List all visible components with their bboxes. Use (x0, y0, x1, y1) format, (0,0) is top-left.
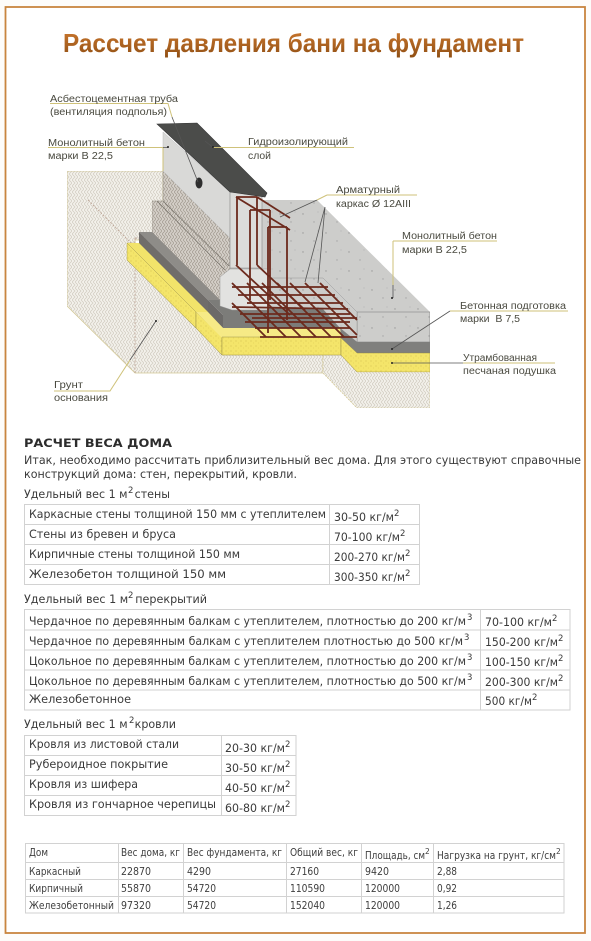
table: floors: Железобетонное (29, 692, 131, 706)
brick wall section (152, 171, 230, 300)
table header: Вес фундамента, кг (187, 846, 282, 859)
row: frame house: 2,88 (437, 865, 457, 878)
table: floors: 2 (552, 614, 557, 624)
intro paragraph: Итак, необходимо рассчитать приблизительный вес дома. Для этого существуют справочные (24, 453, 581, 467)
labels: марки В 22,5 (48, 151, 113, 162)
table: walls: Кирпичные стены толщиной 150 мм (29, 547, 240, 561)
ventilation pipe (196, 178, 202, 188)
row: frame house (29, 865, 457, 878)
table: roofs (24, 735, 296, 816)
row: reinforced concrete house: 54720 (187, 899, 216, 912)
table: floors: 100-150 кг/м (485, 655, 558, 669)
subheading: roofs: 2 (129, 716, 134, 726)
labels: Монолитный бетон (48, 137, 145, 149)
title: Рассчет давления бани на фундамент (63, 28, 524, 58)
row: frame house: 27160 (290, 865, 319, 878)
table: walls: Железобетон толщиной 150 мм (29, 567, 226, 581)
table: walls: 300-350 кг/м (334, 570, 405, 584)
table: floors: 3 (467, 613, 472, 623)
table header: Дом (29, 846, 48, 859)
row: brick house: 54720 (187, 882, 216, 895)
concrete slab (230, 200, 430, 342)
row: reinforced concrete house: 1,26 (437, 899, 457, 912)
row: frame house: 4290 (187, 865, 211, 878)
row: reinforced concrete house: 120000 (365, 899, 400, 912)
table: roofs: Кровля из листовой стали (29, 737, 179, 751)
subheading: walls: 2 (128, 486, 133, 496)
table: roofs: 2 (285, 800, 290, 810)
table: floors: 2 (532, 693, 537, 703)
rebar cage (232, 197, 357, 337)
row: reinforced concrete house (29, 899, 457, 912)
table: floors: 2 (558, 634, 563, 644)
table: walls: Стены из бревен и бруса (29, 527, 176, 541)
intro paragraph (24, 453, 581, 481)
subheading: floors: Удельный вес 1 м перекрытий (24, 592, 207, 606)
table: floors (24, 609, 570, 710)
labels: Бетонная подготовка (460, 301, 566, 312)
table: walls (24, 504, 420, 584)
row: reinforced concrete house: 152040 (290, 899, 325, 912)
table: floors: 3 (467, 653, 472, 663)
table: walls: 2 (394, 509, 399, 519)
waterproofing layer (157, 123, 267, 197)
table: roofs: Рубероидное покрытие (29, 757, 168, 771)
table: floors: Цокольное по деревянным балкам с утеплителем, плотностью до 200 кг/м (29, 654, 466, 668)
wall end face (230, 192, 262, 268)
table: floors: 3 (467, 673, 472, 683)
labels: марки В 7,5 (460, 314, 520, 325)
foundation diagram (48, 93, 568, 408)
table: pressure summary (25, 843, 564, 913)
table header: 2 (425, 847, 430, 856)
table header: Площадь, см (365, 849, 425, 862)
grey concrete preparation (139, 232, 430, 353)
row: brick house: 110590 (290, 882, 325, 895)
table: floors: Цокольное по деревянным балкам с утеплителем, плотностью до 500 кг/м (29, 674, 466, 688)
table: walls: Каркасные стены толщиной 150 мм с утеплителем (29, 507, 326, 521)
subheading: roofs: Удельный вес 1 м кровли (24, 717, 176, 731)
labels: основания (54, 393, 108, 404)
table: walls: 70-100 кг/м (334, 530, 400, 544)
labels: (вентиляция подполья) (50, 107, 167, 118)
table header: Вес дома, кг (121, 846, 180, 859)
row: frame house: 22870 (121, 865, 151, 878)
labels: Асбестоцементная труба (50, 93, 178, 105)
leader lines (48, 104, 568, 391)
rebar mesh (232, 283, 357, 337)
table: floors: Чердачное по деревянным балкам с утеплителем, плотностью до 200 кг/м (29, 614, 466, 628)
table: roofs: Кровля из шифера (29, 777, 138, 791)
table: roofs: 30-50 кг/м (225, 761, 285, 775)
table header: Нагрузка на грунт, кг/см (437, 849, 556, 862)
table: roofs: 60-80 кг/м (225, 801, 285, 815)
table header (29, 846, 561, 862)
row: reinforced concrete house: Железобетонный (29, 899, 114, 912)
small concrete block (220, 269, 268, 310)
labels: марки В 22,5 (402, 245, 467, 256)
row: brick house: 120000 (365, 882, 400, 895)
labels: слой (248, 151, 271, 162)
intro paragraph: конструкций дома: стен, перекрытий, кровли. (24, 467, 297, 481)
table: floors: 200-300 кг/м (485, 675, 558, 689)
labels: каркас Ø 12АIII (336, 199, 411, 210)
table: floors: 2 (558, 654, 563, 664)
table: roofs: 20-30 кг/м (225, 741, 285, 755)
subheading: floors: 2 (128, 591, 133, 601)
row: frame house: Каркасный (29, 865, 81, 878)
labels: Арматурный (336, 185, 400, 196)
row: brick house: 55870 (121, 882, 151, 895)
row: brick house: 0,92 (437, 882, 457, 895)
heading: house weight: РАСЧЕТ ВЕСА ДОМА (24, 436, 172, 450)
table: roofs: 2 (285, 780, 290, 790)
table: floors: 500 кг/м (485, 694, 532, 708)
labels: песчаная подушка (463, 366, 556, 377)
concrete wall (163, 132, 230, 238)
table header: Общий вес, кг (290, 846, 358, 859)
table: floors: Чердачное по деревянным балкам с утеплителем плотностью до 500 кг/м (29, 634, 463, 648)
table: walls: 2 (400, 529, 405, 539)
table: roofs: 2 (285, 760, 290, 770)
labels: Монолитный бетон (402, 230, 497, 242)
labels: Утрамбованная (463, 352, 537, 364)
table: walls: 2 (405, 549, 410, 559)
table header: 2 (556, 847, 561, 856)
table: walls: 2 (405, 569, 410, 579)
table: floors: 2 (558, 674, 563, 684)
table: walls: 200-270 кг/м (334, 550, 405, 564)
table: roofs: 40-50 кг/м (225, 781, 285, 795)
row: brick house (29, 882, 457, 895)
table: floors: 3 (464, 633, 469, 643)
table: walls: 30-50 кг/м (334, 510, 394, 524)
row: reinforced concrete house: 97320 (121, 899, 151, 912)
table: roofs: Кровля из гончарное черепицы (29, 797, 216, 811)
sand cushion (127, 243, 430, 372)
row: brick house: Кирпичный (29, 882, 83, 895)
table: floors: 70-100 кг/м (485, 615, 552, 629)
ground soil (67, 171, 430, 408)
table: roofs: 2 (285, 740, 290, 750)
row: frame house: 9420 (365, 865, 389, 878)
subheading: walls: Удельный вес 1 м стены (24, 487, 170, 501)
table: floors: 150-200 кг/м (485, 635, 558, 649)
labels (48, 93, 566, 404)
labels: Грунт (54, 380, 83, 391)
labels: Гидроизолирующий (248, 137, 348, 148)
